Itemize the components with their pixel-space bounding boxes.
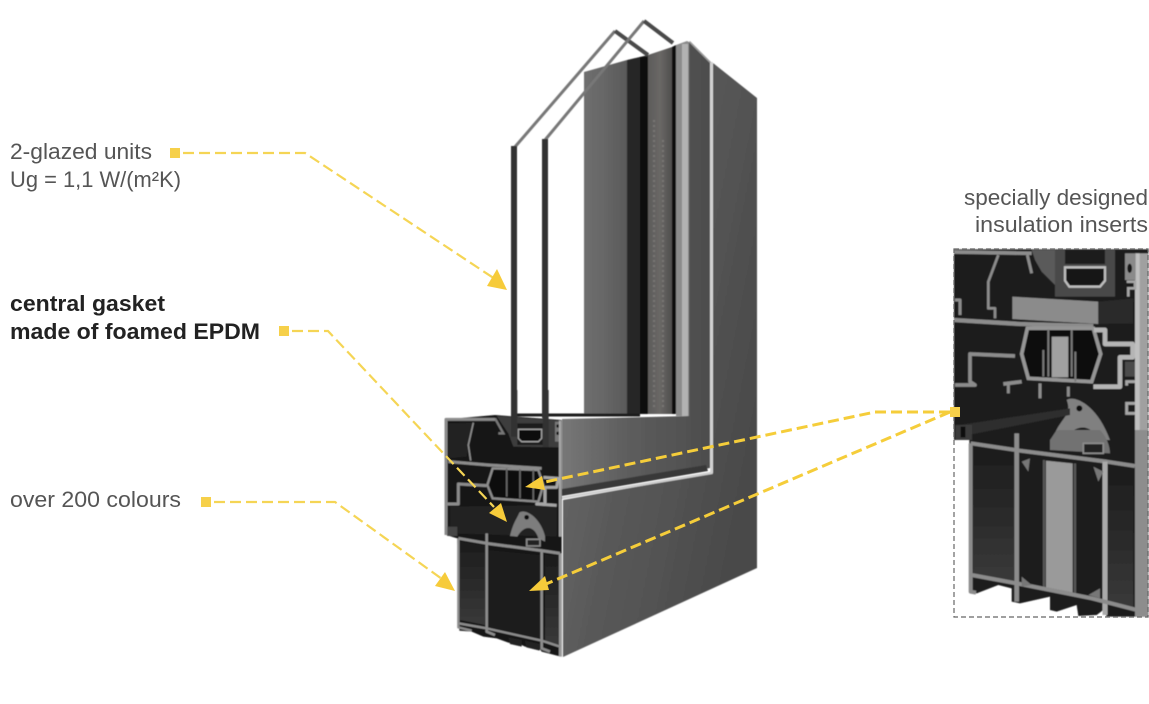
right edge	[556, 421, 563, 537]
sash panel A	[584, 60, 627, 414]
sash bottom line	[511, 414, 640, 416]
bottom legs	[508, 637, 540, 651]
insulation insert	[1052, 337, 1068, 377]
dashed line	[292, 331, 494, 507]
text: made of foamed EPDM: made of foamed EPDM	[10, 319, 260, 344]
inset: insulation insert detail	[950, 249, 1148, 617]
upper profile lines	[446, 419, 495, 535]
marker square	[201, 497, 211, 507]
glass pane one	[511, 31, 648, 418]
sash panel B	[648, 47, 672, 414]
white frame edge	[556, 62, 712, 499]
dashed line	[545, 412, 950, 482]
inset upper part	[954, 249, 1148, 440]
gasket foot	[1050, 430, 1110, 453]
top glazing block	[1055, 250, 1115, 297]
central chamber	[1019, 458, 1102, 593]
insulation insert tall	[1046, 461, 1073, 593]
gasket top	[1032, 250, 1055, 285]
leader: over 200 colours	[201, 497, 455, 591]
spacer texture	[654, 120, 663, 410]
leader: central gasket	[279, 326, 507, 522]
dashed line	[183, 153, 495, 279]
marker square	[950, 407, 960, 417]
groove	[562, 465, 708, 496]
profile line	[954, 320, 1093, 326]
arrow head	[487, 269, 507, 290]
glass bottoms	[511, 390, 517, 437]
inner frame side face	[562, 42, 710, 492]
glazing window	[1065, 267, 1105, 287]
right column	[1135, 253, 1148, 440]
wedge	[495, 418, 503, 433]
far right frame face	[563, 63, 757, 657]
right structure	[1093, 330, 1133, 387]
gasket arc	[1053, 399, 1110, 440]
profile lines	[971, 443, 1135, 466]
inset lower part	[969, 430, 1148, 617]
text: central gasket: central gasket	[10, 291, 166, 316]
text: Ug value: Ug = 1,1 W/(m²K)	[10, 167, 181, 192]
black sash strip	[640, 57, 648, 414]
left stub	[447, 527, 457, 536]
cross section of the profile	[446, 390, 562, 657]
arrow head	[529, 576, 549, 591]
leader: 2-glazed units	[170, 148, 507, 290]
central gasket shape	[510, 512, 545, 542]
arrow head	[525, 476, 545, 490]
right chamber	[1108, 467, 1133, 608]
dashed inset frame	[954, 249, 1148, 617]
dashed line	[214, 502, 442, 579]
silver bead	[676, 41, 689, 416]
dark sill	[960, 408, 1070, 437]
section silhouette	[446, 415, 562, 657]
top rail	[954, 252, 1032, 253]
text: insulation inserts: insulation inserts	[975, 212, 1148, 237]
left chamber	[973, 448, 1014, 581]
black strip right	[672, 45, 676, 414]
gasket window	[518, 429, 542, 442]
text: 2-glazed units: 2-glazed units	[10, 139, 152, 164]
light insulation block	[1012, 297, 1098, 324]
leader: insulation insert upper	[525, 412, 950, 490]
lower chambers	[460, 542, 485, 625]
arrow head	[435, 572, 455, 591]
window profile illustration	[446, 21, 757, 657]
glazing bead	[497, 416, 561, 447]
lower profile lines	[458, 538, 560, 553]
thermal break	[487, 468, 543, 502]
text: specially designed: specially designed	[964, 185, 1148, 210]
arrow head	[489, 503, 507, 522]
dark sash strip	[627, 55, 648, 414]
thermal break hexagon	[1022, 328, 1101, 382]
text: over 200 colours: over 200 colours	[10, 487, 181, 512]
dashed line	[546, 412, 950, 584]
leader: insulation insert lower	[529, 412, 950, 591]
right screw	[555, 422, 561, 442]
marker square	[170, 148, 180, 158]
right column	[1135, 430, 1148, 617]
glass pane two	[542, 21, 673, 418]
marker square	[279, 326, 289, 336]
side top edge	[689, 41, 711, 63]
